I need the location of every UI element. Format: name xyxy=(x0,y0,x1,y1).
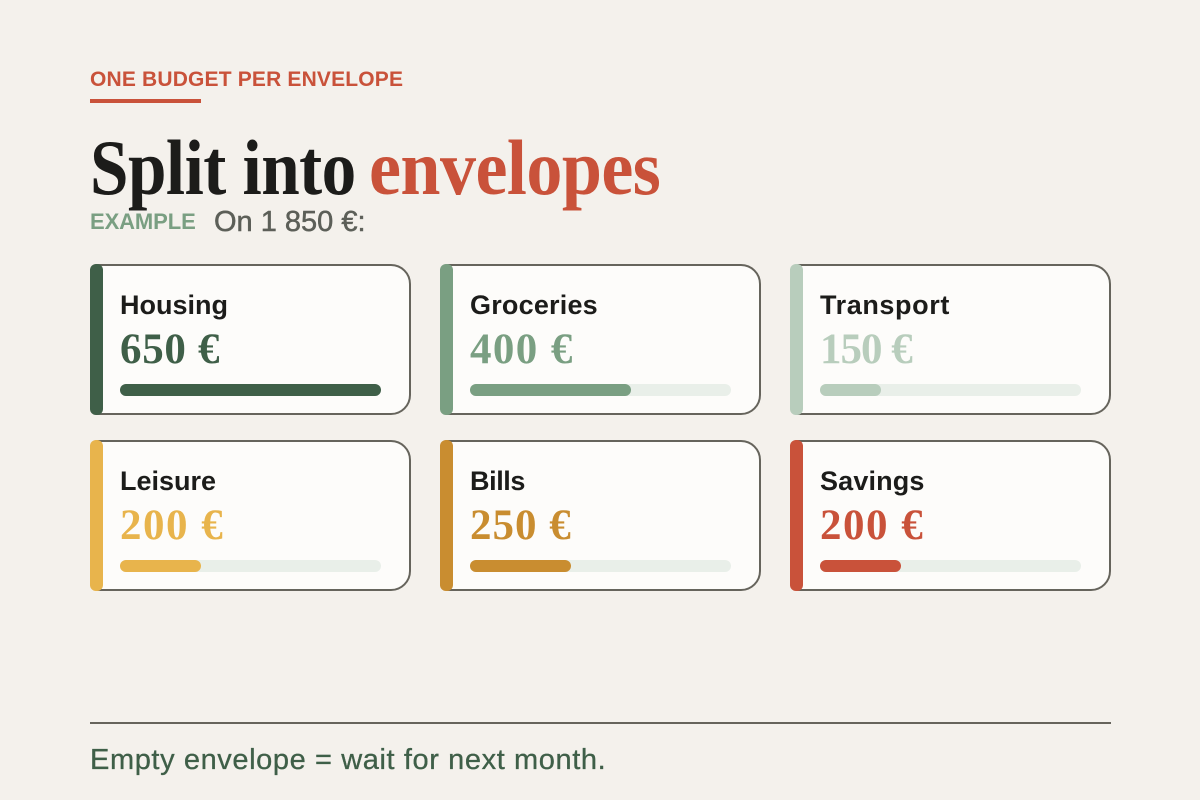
title: envelopes xyxy=(369,124,660,211)
leisure label: Leisure xyxy=(120,466,216,496)
groceries label: Groceries xyxy=(470,290,598,320)
savings amount: 200 € xyxy=(820,502,924,549)
transport label: Transport xyxy=(820,290,950,320)
housing label: Housing xyxy=(120,290,228,320)
groceries bar xyxy=(470,384,731,396)
panel: transport xyxy=(790,264,1111,415)
housing amount: 650 € xyxy=(120,326,220,373)
title: Split into xyxy=(90,124,356,211)
leisure bar xyxy=(120,560,381,572)
panel: housing xyxy=(90,264,411,415)
footer note: Empty envelope = wait for next month. xyxy=(90,744,606,776)
transport amount: 150 € xyxy=(820,326,912,373)
eyebrow underline xyxy=(90,99,201,103)
bills label: Bills xyxy=(470,466,525,496)
panel: leisure xyxy=(90,440,411,591)
panel: bills xyxy=(440,440,761,591)
housing bar xyxy=(120,384,381,396)
bills bar xyxy=(470,560,731,572)
bills amount: 250 € xyxy=(470,502,572,549)
savings bar xyxy=(820,560,1081,572)
panel: groceries xyxy=(440,264,761,415)
panel: savings xyxy=(790,440,1111,591)
groceries amount: 400 € xyxy=(470,326,574,373)
eyebrow label: ONE BUDGET PER ENVELOPE xyxy=(90,68,403,91)
leisure amount: 200 € xyxy=(120,502,224,549)
savings label: Savings xyxy=(820,466,925,496)
title xyxy=(90,124,660,211)
transport bar xyxy=(820,384,1081,396)
example text: On 1 850 €: xyxy=(214,206,366,238)
example tag: EXAMPLE xyxy=(90,209,196,234)
